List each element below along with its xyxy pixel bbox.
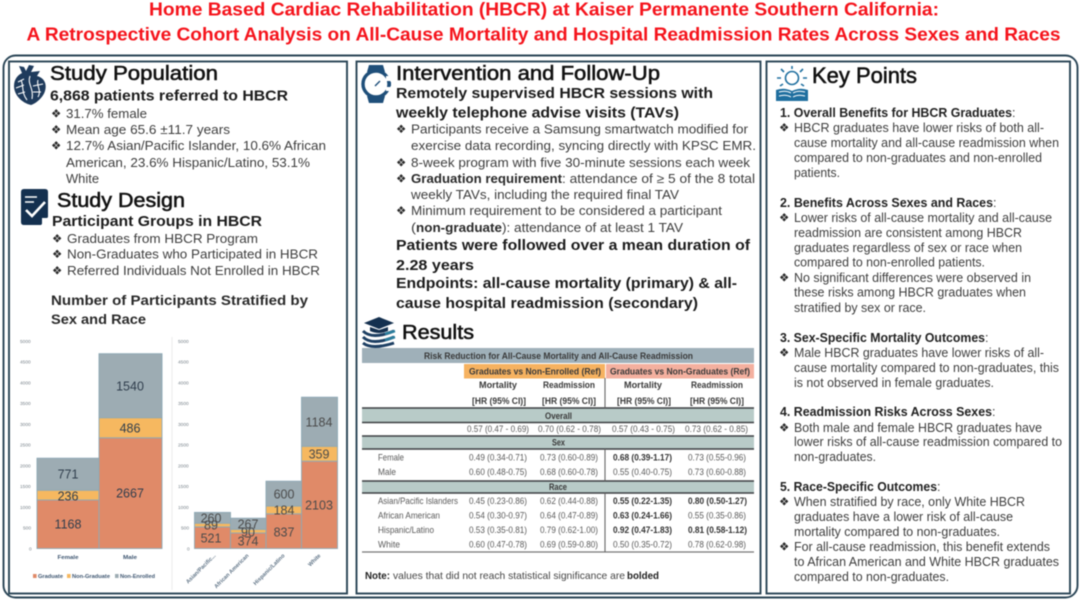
bar chart: by sex: 1540 bbox=[116, 380, 144, 394]
bar chart: by sex: 236 bbox=[58, 490, 78, 504]
bar chart: by race: 359 bbox=[309, 448, 329, 462]
results table: 0.50 (0.35-0.72) bbox=[613, 540, 672, 550]
bar chart: by race: 4000 bbox=[178, 380, 189, 386]
bar chart: by race: 3500 bbox=[178, 401, 189, 407]
bar chart: by sex: 0 bbox=[29, 546, 32, 552]
results table: White bbox=[378, 540, 400, 550]
chart legend bbox=[33, 574, 156, 580]
key point 3: Male HBCR graduates have lower risks of all- bbox=[794, 346, 1044, 360]
results table: 0.80 (0.50-1.27) bbox=[688, 496, 747, 506]
key point 3 bbox=[779, 331, 1059, 390]
key point 1: 1. Overall Benefits for HBCR Graduates bbox=[780, 106, 1012, 120]
key point 4: Both male and female HBCR graduates have bbox=[794, 421, 1042, 435]
icon: checklist document bbox=[21, 189, 48, 225]
design bullets: Referred Individuals Not Enrolled in HBCR bbox=[67, 263, 320, 278]
key point 2: 2. Benefits Across Sexes and Races bbox=[780, 196, 993, 210]
intervention bullets: ❖ bbox=[396, 122, 406, 136]
follow-up and endpoints: Patients were followed over a mean duration of bbox=[396, 237, 751, 254]
results table: 0.45 (0.23-0.86) bbox=[469, 496, 527, 506]
population bullets: 12.7% Asian/Pacific Islander, 10.6% African bbox=[66, 138, 326, 153]
results table: 0.78 (0.62-0.98) bbox=[688, 540, 746, 550]
bar chart: by sex: 3000 bbox=[20, 422, 31, 428]
intervention bullets: ❖ bbox=[396, 156, 406, 170]
key point 4: non-graduates. bbox=[794, 450, 876, 464]
intervention bullets: Graduation requirement bbox=[411, 171, 563, 186]
results table: 0.49 (0.34-0.71) bbox=[469, 452, 527, 462]
key point 5: to African American and White HBCR graduates bbox=[794, 555, 1059, 569]
intervention bullets: ( bbox=[411, 220, 417, 235]
results table: 0.73 (0.60-0.89) bbox=[540, 452, 598, 462]
key point 5: ❖ bbox=[779, 494, 789, 508]
panel: key points bbox=[766, 62, 1070, 594]
key point 5: : bbox=[937, 480, 940, 494]
title: A Retrospective Cohort Analysis on All-Cause Mortality and Hospital Readmission Rates Across Sexes and Races bbox=[26, 24, 1060, 44]
results table: 0.69 (0.59-0.80) bbox=[540, 540, 598, 550]
key point 2: readmission are consistent among HBCR bbox=[794, 226, 1022, 240]
bar chart: by sex: 4500 bbox=[20, 360, 31, 366]
key point 4: : bbox=[992, 405, 995, 419]
results table: Risk Reduction for All-Cause Mortality and All-Cause Readmission bbox=[424, 350, 693, 361]
key point 3: ❖ bbox=[779, 346, 789, 360]
bar chart: by race: Asian/Pacific... bbox=[185, 553, 218, 585]
bar chart: by race: 1184 bbox=[306, 416, 332, 430]
bar chart: by race: 0 bbox=[187, 546, 190, 552]
bar chart: by sex: 771 bbox=[58, 468, 78, 482]
key point 5: 5. Race-Specific Outcomes bbox=[780, 480, 937, 494]
bar chart: by sex: Female bbox=[58, 555, 78, 561]
key point 1: patients. bbox=[794, 166, 840, 180]
panel: intervention and results bbox=[356, 62, 760, 594]
key point 1: cause mortality and all-cause readmission when bbox=[794, 136, 1059, 150]
results table: 0.57 (0.47 - 0.69) bbox=[467, 424, 529, 434]
design bullets: Graduates from HBCR Program bbox=[67, 231, 258, 246]
bar chart: by sex: 486 bbox=[120, 422, 140, 436]
results table: 0.55 (0.35-0.86) bbox=[688, 510, 746, 520]
intervention bullets: : attendance of ≥ 5 of the 8 total bbox=[562, 171, 755, 186]
bar chart: by race: 2000 bbox=[178, 464, 189, 470]
key point 5: For all-cause readmission, this benefit extends bbox=[794, 540, 1050, 554]
key point 1: compared to non-graduates and non-enrolled bbox=[794, 151, 1042, 165]
chart legend: Non-Enrolled bbox=[120, 574, 156, 580]
subheading: participant groups: Participant Groups in HBCR bbox=[52, 213, 262, 230]
key point 2: graduates regardless of sex or race when bbox=[794, 241, 1022, 255]
results table: Mortality bbox=[624, 379, 663, 390]
key point 5 bbox=[779, 480, 1059, 584]
results table: 0.68 (0.60-0.78) bbox=[540, 467, 598, 477]
key point 5: compared to non-graduates. bbox=[794, 570, 949, 584]
results table: Female bbox=[378, 452, 404, 462]
bar chart: by race: White bbox=[307, 553, 322, 568]
intervention bullets: exercise data recording, syncing directly with KPSC EMR. bbox=[411, 138, 756, 153]
bar chart: by race: 3000 bbox=[178, 422, 189, 428]
results table: 0.53 (0.35-0.81) bbox=[469, 525, 527, 535]
population bullets: American, 23.6% Hispanic/Latino, 53.1% bbox=[66, 155, 310, 170]
bar chart: by race: 184 bbox=[274, 504, 294, 518]
follow-up and endpoints bbox=[396, 237, 751, 312]
results table: 0.81 (0.58-1.12) bbox=[688, 525, 747, 535]
subheading: remote sessions: Remotely supervised HBCR sessions with bbox=[396, 85, 713, 102]
key point 1: ❖ bbox=[779, 120, 789, 134]
bar chart: by race: 2103 bbox=[305, 498, 333, 512]
intervention bullets: Participants receive a Samsung smartwatch modified for bbox=[411, 122, 749, 136]
heading: results: Results bbox=[402, 322, 474, 344]
icon: results books bbox=[363, 317, 395, 346]
bar chart: by race bbox=[178, 339, 338, 590]
subheading: remote sessions: weekly telephone advise visits (TAVs) bbox=[395, 104, 679, 122]
design bullets: ❖ bbox=[52, 264, 62, 278]
intervention bullets: 8-week program with five 30-minute sessions each week bbox=[411, 155, 751, 170]
results table: 0.54 (0.30-0.97) bbox=[469, 510, 527, 520]
icon: book and light bulb bbox=[776, 66, 808, 101]
heading: key points: Key Points bbox=[812, 63, 917, 88]
key point 5: mortality compared to non-graduates. bbox=[794, 525, 1000, 539]
results table: 0.68 (0.39-1.17) bbox=[613, 452, 672, 462]
results table: Readmission bbox=[543, 379, 595, 390]
key point 2: stratified by sex or race. bbox=[794, 301, 926, 315]
intervention bullets: weekly TAVs, including the required final TAV bbox=[410, 187, 679, 202]
results table: [HR (95% CI)] bbox=[617, 395, 671, 406]
results table: African American bbox=[378, 510, 440, 520]
results table: 0.73 (0.55-0.96) bbox=[688, 452, 746, 462]
population bullets: ❖ bbox=[51, 106, 61, 120]
key point 4 bbox=[779, 405, 1062, 464]
design bullets: Non-Graduates who Participated in HBCR bbox=[67, 246, 318, 262]
bar chart: by race: 374 bbox=[238, 534, 258, 548]
heading: intervention: Intervention and Follow-Up bbox=[396, 63, 660, 85]
results table: 0.57 (0.43 - 0.75) bbox=[612, 424, 675, 434]
results table: 0.55 (0.22-1.35) bbox=[613, 496, 672, 506]
subheading: remote sessions bbox=[395, 85, 713, 122]
results table: 0.63 (0.24-1.66) bbox=[613, 510, 672, 520]
results table: 0.73 (0.62 - 0.85) bbox=[685, 424, 748, 434]
key point 1: : bbox=[1012, 106, 1015, 120]
results table: Graduates vs Non-Enrolled (Ref) bbox=[469, 366, 601, 376]
bar chart: by sex: 2667 bbox=[116, 486, 144, 500]
design bullets: ❖ bbox=[52, 247, 62, 261]
subheading: patients: 6,868 patients referred to HBCR bbox=[50, 88, 288, 104]
key point 4: ❖ bbox=[779, 420, 789, 434]
key point 3: is not observed in female graduates. bbox=[794, 376, 994, 390]
bar chart: by race: 260 bbox=[201, 512, 221, 526]
follow-up and endpoints: cause hospital readmission (secondary) bbox=[396, 295, 698, 312]
bar chart: by race: 521 bbox=[201, 532, 221, 546]
key point 1: HBCR graduates have lower risks of both all- bbox=[794, 121, 1044, 135]
bar chart: by race: 1000 bbox=[178, 505, 189, 511]
bar chart: by race: 1500 bbox=[178, 484, 189, 490]
heading: study population: Study Population bbox=[50, 63, 218, 85]
intervention bullets: Minimum requirement to be considered a participant bbox=[411, 203, 722, 218]
chart legend: Graduate bbox=[38, 574, 63, 580]
results table bbox=[362, 348, 754, 552]
key point 2: ❖ bbox=[779, 210, 789, 224]
follow-up and endpoints: 2.28 years bbox=[396, 257, 474, 274]
bar chart: by sex: 1168 bbox=[55, 518, 81, 532]
intervention bullets: ): attendance of at least 1 TAV bbox=[502, 220, 683, 235]
results table: Race bbox=[549, 481, 567, 492]
bar chart: by race: 837 bbox=[274, 526, 294, 540]
results table: Asian/Pacific Islanders bbox=[378, 496, 459, 506]
bar chart: by sex: 2000 bbox=[20, 464, 31, 470]
key point 2: compared to non-enrolled patients. bbox=[794, 256, 985, 270]
chart title: Sex and Race bbox=[51, 311, 146, 327]
results table: Male bbox=[378, 467, 396, 477]
design bullets: ❖ bbox=[52, 232, 62, 246]
bar chart: by sex: 1500 bbox=[20, 484, 31, 490]
results table: [HR (95% CI)] bbox=[472, 395, 526, 406]
results table: 0.60 (0.47-0.78) bbox=[469, 540, 527, 550]
bar chart: by race: 90 bbox=[241, 526, 255, 540]
results table: 0.92 (0.47-1.83) bbox=[613, 525, 672, 535]
bar chart: by sex: 500 bbox=[23, 526, 31, 532]
results table: 0.79 (0.62-1.00) bbox=[540, 525, 598, 535]
key point 4: lower risks of all-cause readmission compared to bbox=[794, 435, 1062, 449]
key point 2: No significant differences were observed in bbox=[794, 271, 1031, 285]
intervention bullets bbox=[396, 122, 756, 235]
key point 5: When stratified by race, only White HBCR bbox=[794, 495, 1025, 509]
icon: smartwatch bbox=[363, 65, 392, 103]
chart title: Number of Participants Stratified by bbox=[51, 292, 308, 308]
bar chart: by race: Hispanic/Latino bbox=[253, 553, 287, 587]
bar chart: by race: 2500 bbox=[178, 442, 189, 448]
icon: heart bbox=[14, 65, 46, 105]
population bullets: ❖ bbox=[51, 138, 61, 152]
bar chart: by sex: 3500 bbox=[20, 401, 31, 407]
follow-up and endpoints: Endpoints: all-cause mortality (primary) & all- bbox=[396, 275, 737, 292]
results table: 0.73 (0.60-0.88) bbox=[688, 467, 746, 477]
chart legend: Non-Graduate bbox=[72, 574, 110, 580]
bar chart: by race: 5000 bbox=[178, 339, 189, 345]
bar chart: by race: 267 bbox=[238, 518, 258, 532]
key point 2: Lower risks of all-cause mortality and all-cause bbox=[794, 211, 1052, 225]
results table: 0.60 (0.48-0.75) bbox=[469, 467, 527, 477]
population bullets bbox=[51, 106, 326, 186]
title bbox=[26, 0, 1060, 44]
bar chart: by sex: 4000 bbox=[20, 380, 31, 386]
bar chart: by sex bbox=[20, 339, 162, 561]
population bullets: Mean age 65.6 ±11.7 years bbox=[66, 122, 231, 137]
panel: study population and design bbox=[9, 62, 347, 594]
results table: 0.55 (0.40-0.75) bbox=[613, 467, 672, 477]
design bullets bbox=[52, 231, 320, 278]
bar chart: by race: African American bbox=[214, 553, 251, 590]
bar chart: by race: 500 bbox=[181, 526, 189, 532]
bar chart: by sex: 2500 bbox=[20, 442, 31, 448]
intervention bullets: ❖ bbox=[396, 172, 406, 186]
results table: Mortality bbox=[479, 379, 518, 390]
heading: study design: Study Design bbox=[57, 190, 185, 212]
results table: 0.64 (0.47-0.89) bbox=[540, 510, 598, 520]
bar chart: by race: 600 bbox=[274, 488, 294, 502]
key point 3: : bbox=[985, 331, 988, 345]
results table: [HR (95% CI)] bbox=[690, 395, 744, 406]
key point 1 bbox=[779, 106, 1059, 180]
key point 5: ❖ bbox=[779, 540, 789, 554]
key point 3: cause mortality compared to non-graduates, this bbox=[794, 361, 1059, 375]
intervention bullets: ❖ bbox=[396, 204, 406, 218]
results table: Sex bbox=[552, 436, 566, 448]
key point 2: ❖ bbox=[779, 270, 789, 284]
results table: Graduates vs Non-Graduates (Ref) bbox=[610, 366, 750, 376]
table note: Note: bbox=[365, 570, 390, 582]
bar chart: by sex: 1000 bbox=[20, 505, 31, 511]
key point 2 bbox=[779, 196, 1052, 315]
key point 3: 3. Sex-Specific Mortality Outcomes bbox=[780, 331, 985, 345]
table note: values that did not reach statistical significance are bbox=[393, 570, 625, 582]
population bullets: ❖ bbox=[51, 122, 61, 136]
results table: Hispanic/Latino bbox=[378, 525, 434, 535]
key point 5: graduates have a lower risk of all-cause bbox=[794, 510, 1013, 524]
bar chart: by sex: Male bbox=[123, 555, 137, 561]
results table: Readmission bbox=[691, 379, 743, 390]
key point 2: : bbox=[993, 196, 996, 210]
population bullets: 31.7% female bbox=[66, 106, 147, 121]
bar chart: by sex: 5000 bbox=[20, 339, 31, 345]
results table: Overall bbox=[545, 410, 572, 421]
results table: [HR (95% CI)] bbox=[542, 395, 596, 406]
results table: 0.70 (0.62 - 0.78) bbox=[538, 424, 601, 434]
key point 2: these risks among HBCR graduates when bbox=[794, 286, 1026, 300]
table note: bolded bbox=[627, 570, 659, 582]
bar chart: by race: 89 bbox=[204, 518, 218, 532]
population bullets: White bbox=[66, 171, 99, 186]
bar chart: by race: 4500 bbox=[178, 360, 189, 366]
chart title bbox=[51, 292, 308, 327]
key point 4: 4. Readmission Risks Across Sexes bbox=[780, 405, 992, 419]
results table: 0.62 (0.44-0.88) bbox=[540, 496, 598, 506]
intervention bullets: non-graduate bbox=[416, 220, 502, 235]
